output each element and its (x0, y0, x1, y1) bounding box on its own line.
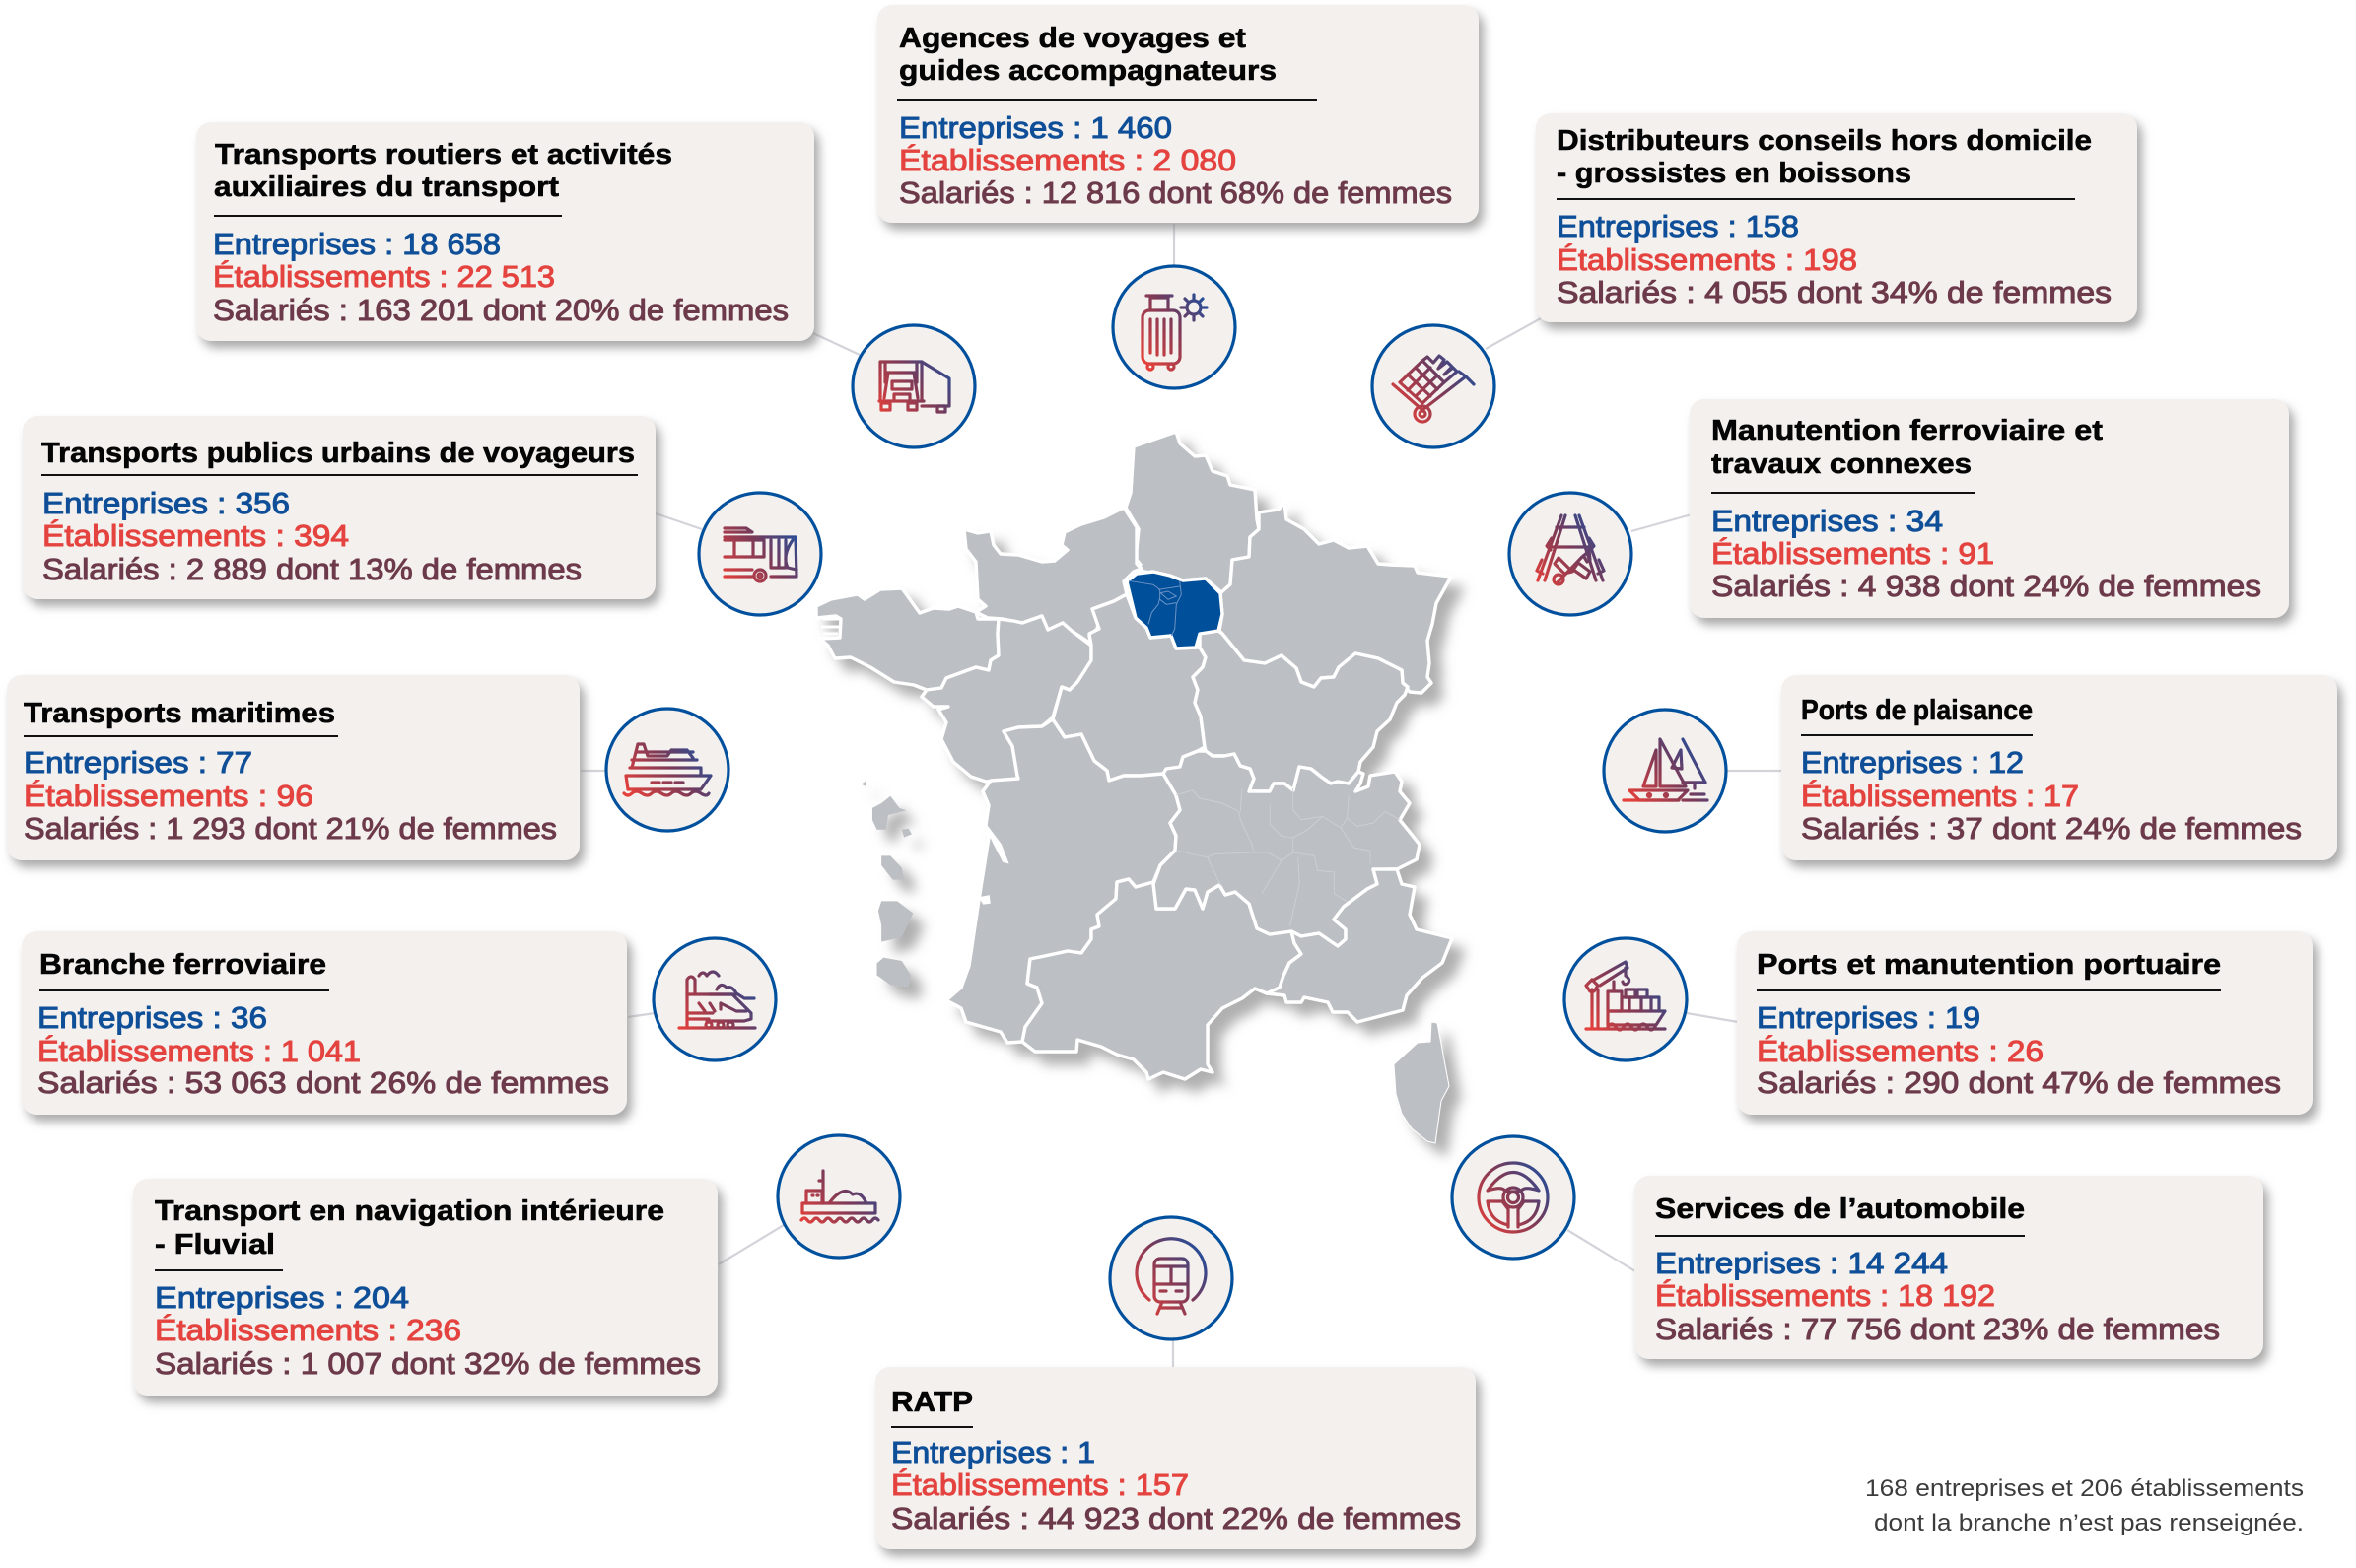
panel: ports de plaisance (1781, 675, 2337, 860)
icon: bottle cart (1372, 325, 1494, 447)
panel: distributeurs conseils: Distributeurs conseils hors domicile (1557, 125, 2092, 157)
panel: services de l'automobile: Entreprises : 14 244 (1655, 1246, 1948, 1280)
icon: luggage (1113, 266, 1235, 388)
panel: branche ferroviaire (22, 931, 627, 1115)
panel: agences de voyages (877, 5, 1479, 223)
panel: branche ferroviaire: Établissements : 1 041 (37, 1034, 361, 1068)
icon: steering wheel (1452, 1136, 1574, 1259)
panel: transports routiers: Salariés : 163 201 dont 20% de femmes (213, 293, 789, 327)
panel: ports de plaisance: Établissements : 17 (1801, 779, 2079, 813)
panel: transports routiers: Entreprises : 18 658 (213, 227, 501, 261)
panel: ports et manutention portuaire: Ports et manutention portuaire (1757, 949, 2221, 981)
panel: ports et manutention portuaire: Établissements : 26 (1757, 1034, 2044, 1068)
icon: high-speed train (654, 938, 776, 1060)
panel: ports de plaisance: Salariés : 37 dont 24% de femmes (1801, 811, 2302, 846)
panel: distributeurs conseils: - grossistes en boissons (1557, 158, 1911, 189)
panel: navigation intérieure: Entreprises : 204 (155, 1280, 409, 1315)
map of France with Île-de-France highlighted (816, 432, 1452, 1143)
panel: transports publics urbains (23, 416, 656, 599)
panel: navigation intérieure (133, 1179, 718, 1396)
icon: railway and tools (1509, 493, 1631, 615)
panel: navigation intérieure: Salariés : 1 007 dont 32% de femmes (155, 1346, 701, 1381)
panel: distributeurs conseils: Entreprises : 158 (1557, 209, 1799, 243)
panel: agences de voyages: Agences de voyages et (899, 23, 1246, 54)
panel: transports routiers: Transports routiers et activités (215, 139, 672, 170)
panel: agences de voyages: guides accompagnateurs (899, 55, 1277, 87)
panel: RATP: Entreprises : 1 (891, 1435, 1095, 1469)
panel: agences de voyages: Salariés : 12 816 dont 68% de femmes (899, 175, 1452, 210)
panel: manutention ferroviaire: Entreprises : 34 (1711, 504, 1943, 538)
icon: river barge (778, 1135, 900, 1258)
panel: manutention ferroviaire: Manutention ferroviaire et (1711, 415, 2103, 446)
panel: RATP: Salariés : 44 923 dont 22% de femmes (891, 1501, 1461, 1535)
footnote: dont la branche n’est pas renseignée. (1874, 1510, 2304, 1536)
panel: RATP: Établissements : 157 (891, 1467, 1189, 1502)
panel: transports maritimes: Salariés : 1 293 dont 21% de femmes (24, 811, 557, 846)
panel: ports et manutention portuaire (1737, 931, 2313, 1115)
connector lines (581, 224, 1783, 1368)
panel: transports routiers: auxiliaires du transport (214, 171, 559, 203)
panel: RATP: RATP (891, 1387, 973, 1418)
panel: distributeurs conseils: Salariés : 4 055 dont 34% de femmes (1557, 275, 2112, 309)
panel: branche ferroviaire: Branche ferroviaire (39, 949, 326, 981)
footnote: 168 entreprises et 206 établissements (1865, 1475, 2304, 1502)
icon: RATP metro (1110, 1217, 1232, 1339)
panel: transports routiers (196, 122, 814, 341)
icon: truck (853, 325, 975, 447)
panel: distributeurs conseils (1536, 113, 2137, 322)
panel: manutention ferroviaire: Établissements : 91 (1711, 536, 1994, 571)
panel: services de l'automobile: Établissements : 18 192 (1655, 1278, 1995, 1313)
panel: agences de voyages: Établissements : 2 080 (899, 143, 1236, 177)
panel: transports maritimes: Transports maritimes (24, 698, 335, 729)
panel: transports publics urbains: Salariés : 2 889 dont 13% de femmes (42, 552, 582, 586)
panel: navigation intérieure: - Fluvial (155, 1229, 275, 1261)
panel: branche ferroviaire: Entreprises : 36 (37, 1000, 267, 1035)
panel: transports routiers: Établissements : 22 513 (213, 259, 555, 294)
panel: navigation intérieure: Établissements : 236 (155, 1313, 461, 1347)
panel: services de l'automobile: Services de l’automobile (1655, 1193, 2025, 1225)
panel: RATP (875, 1367, 1476, 1549)
panel: transports publics urbains: Établissements : 394 (42, 518, 349, 553)
panel: manutention ferroviaire: travaux connexes (1711, 448, 1972, 480)
panel: manutention ferroviaire (1690, 399, 2289, 618)
icon: port crane and container ship (1564, 938, 1687, 1060)
icon: ferry (606, 709, 728, 831)
panel: ports et manutention portuaire: Entreprises : 19 (1757, 1000, 1980, 1035)
icon: sailboats (1604, 710, 1726, 832)
panel: branche ferroviaire: Salariés : 53 063 dont 26% de femmes (37, 1065, 609, 1100)
panel: transports publics urbains: Transports publics urbains de voyageurs (41, 438, 635, 469)
panel: transports publics urbains: Entreprises : 356 (42, 486, 290, 520)
panel: ports de plaisance: Entreprises : 12 (1801, 745, 2024, 780)
panel: services de l'automobile: Salariés : 77 756 dont 23% de femmes (1655, 1312, 2220, 1346)
panel: transports maritimes: Établissements : 96 (24, 779, 313, 813)
panel: manutention ferroviaire: Salariés : 4 938 dont 24% de femmes (1711, 569, 2261, 603)
footnote (1865, 1475, 2304, 1536)
panel: transports maritimes (7, 675, 580, 860)
panel: navigation intérieure: Transport en navigation intérieure (155, 1195, 664, 1227)
panel: services de l'automobile (1634, 1176, 2263, 1359)
panel: transports maritimes: Entreprises : 77 (24, 745, 252, 780)
panel: agences de voyages: Entreprises : 1 460 (899, 110, 1172, 145)
panel: distributeurs conseils: Établissements : 198 (1557, 242, 1857, 277)
panel: ports et manutention portuaire: Salariés : 290 dont 47% de femmes (1757, 1065, 2281, 1100)
icon: bus (699, 493, 821, 615)
panel: ports de plaisance: Ports de plaisance (1801, 695, 2033, 726)
